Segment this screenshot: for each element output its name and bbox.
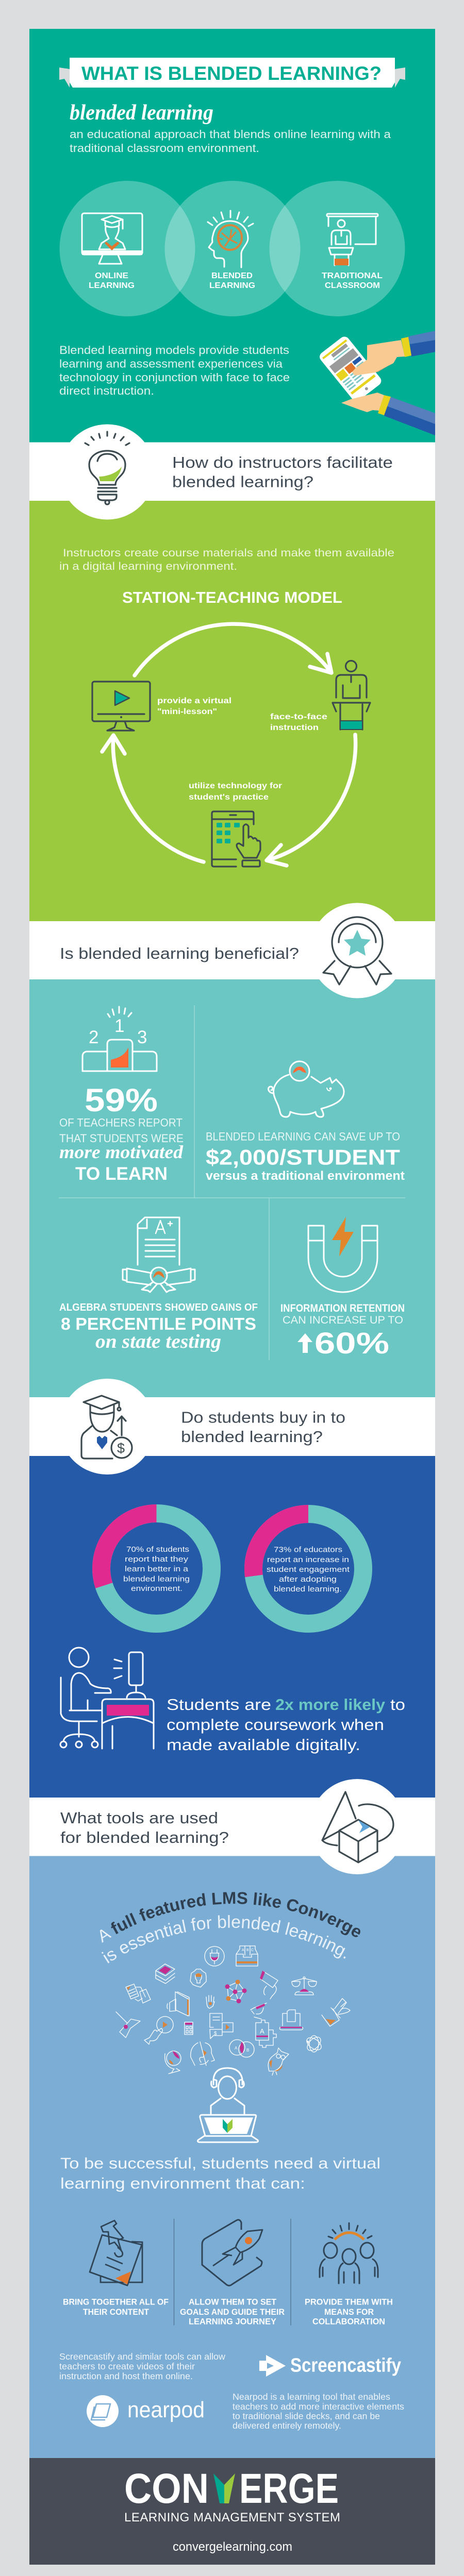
arrow: practice to video xyxy=(102,735,204,862)
heading xyxy=(60,1809,229,1846)
callout: coursework: complete coursework when xyxy=(167,1716,384,1734)
icon: calculator xyxy=(185,2022,193,2035)
column labels: THEIR CONTENT xyxy=(83,2307,150,2317)
icon: graduate and dollar xyxy=(81,1396,132,1459)
text: nearpod: delivered entirely remotely. xyxy=(233,2420,341,2431)
icon: venn A B: B xyxy=(246,2048,249,2053)
stat: 2000 per student xyxy=(206,1130,405,1183)
heading: Is blended learning beneficial? xyxy=(60,944,299,962)
heading: How do instructors facilitate xyxy=(172,453,393,471)
stat: 59 percent: 59% xyxy=(85,1082,158,1118)
icon: podium xyxy=(82,1007,157,1071)
icon: documents xyxy=(126,1984,151,2003)
heading: What tools are used xyxy=(60,1809,218,1827)
heading xyxy=(172,453,393,490)
paragraph: technology in conjunction with face to face xyxy=(59,371,290,384)
paragraph: direct instruction. xyxy=(59,384,154,397)
icon: test and diploma xyxy=(123,1217,195,1292)
icon cluster: learning topics xyxy=(116,1946,350,2075)
curved heading: is essential for blended learning. xyxy=(101,1915,345,1963)
intro text: Instructors create course materials and make them available xyxy=(63,547,394,559)
panel: benefits xyxy=(29,979,435,1397)
circle labels: LEARNING xyxy=(209,281,255,290)
text: screencastify: teachers to create videos of their xyxy=(59,2361,195,2371)
panel: what is blended learning xyxy=(29,29,435,443)
model heading: STATION-TEACHING MODEL xyxy=(122,588,342,606)
icon: scale xyxy=(292,1977,317,1995)
heading xyxy=(181,1409,345,1446)
icon: puzzle: A xyxy=(260,2027,264,2035)
paragraph: learning and assessment experiences via xyxy=(59,358,283,370)
definition text xyxy=(70,128,391,155)
arrow: video to face-to-face xyxy=(135,624,332,675)
definition text: an educational approach that blends online learning with a xyxy=(70,128,391,141)
heading: blended learning? xyxy=(181,1428,323,1446)
icon: 3d shapes xyxy=(322,1792,393,1862)
stat: 2000 per student: BLENDED LEARNING CAN SAVE UP TO xyxy=(206,1130,400,1143)
stat: 59 percent: OF TEACHERS REPORT xyxy=(59,1116,183,1129)
column labels: LEARNING JOURNEY xyxy=(189,2316,277,2327)
band: do students buy in xyxy=(29,1379,435,1475)
callout: coursework xyxy=(167,1696,405,1754)
curved heading: A full featured LMS like Converge xyxy=(100,1892,360,1943)
stat: 8 percentile points: on state testing xyxy=(95,1331,221,1352)
heading: blended learning? xyxy=(172,473,313,490)
paragraph: Blended learning models provide students xyxy=(59,344,289,357)
donut text: after adopting xyxy=(279,1575,337,1584)
icon: owl xyxy=(268,2048,289,2075)
donut text: environment. xyxy=(131,1584,183,1593)
icon: plug xyxy=(205,1946,224,1966)
stat: 8 percentile points: 8 PERCENTILE POINTS xyxy=(61,1314,256,1333)
band: how do instructors facilitate xyxy=(29,425,435,519)
stat: retention 60 percent: 60% xyxy=(314,1327,389,1360)
callout: coursework: Students are xyxy=(167,1696,271,1714)
icon: hand xyxy=(206,1995,214,2008)
icon: collaboration people xyxy=(320,2223,378,2283)
donut text: student engagement xyxy=(267,1565,350,1574)
label: face-to-face: instruction xyxy=(270,723,319,732)
definition text: traditional classroom environment. xyxy=(70,142,259,155)
column labels: PROVIDE THEM WITH xyxy=(305,2297,393,2307)
circle labels: LEARNING xyxy=(89,281,135,290)
column labels: COLLABORATION xyxy=(312,2316,385,2327)
logo: nearpod xyxy=(87,2395,205,2427)
donut chart: 70 percent xyxy=(101,1514,211,1624)
icon: network xyxy=(225,1979,246,2003)
label: practice: student's practice xyxy=(189,793,269,802)
panel: student buy-in xyxy=(29,1456,435,1798)
donut text: 73% of educators xyxy=(274,1546,342,1554)
callout: coursework: made available digitally. xyxy=(167,1736,360,1754)
stat: retention 60 percent xyxy=(280,1302,405,1360)
script heading: blended learning xyxy=(70,101,213,125)
icon: teacher at podium xyxy=(333,660,370,730)
text: to be successful: learning environment that can: xyxy=(60,2175,305,2192)
label: face-to-face xyxy=(270,713,327,732)
icon: rocket laptop xyxy=(202,2220,262,2285)
text: nearpod: teachers to add more interactive elements xyxy=(233,2401,404,2412)
column labels: MEANS FOR xyxy=(324,2307,374,2317)
heading: for blended learning? xyxy=(60,1828,229,1846)
circle labels: ONLINE xyxy=(95,272,128,280)
intro text xyxy=(59,547,394,572)
logo: nearpod: nearpod xyxy=(127,2397,205,2422)
band: what tools are used xyxy=(29,1779,435,1874)
icon: file box xyxy=(236,1946,258,1966)
label: mini-lesson: provide a virtual xyxy=(157,697,231,705)
icon: file box: B xyxy=(246,1948,249,1952)
text: to be successful: To be successful, students need a virtual xyxy=(60,2155,380,2172)
stat: 59 percent xyxy=(59,1082,184,1184)
venn circles xyxy=(60,181,405,316)
icon: chat bubbles: $ xyxy=(214,2031,217,2037)
icon: video monitor xyxy=(92,682,150,731)
band: is blended learning beneficial xyxy=(29,903,435,998)
donut text: blended learning. xyxy=(274,1585,342,1594)
text: screencastify xyxy=(59,2351,225,2381)
circle labels xyxy=(89,272,383,290)
icon: venn A B xyxy=(229,2040,254,2057)
icon: chat bubbles xyxy=(210,2013,233,2039)
column labels: GOALS AND GUIDE THEIR xyxy=(180,2307,285,2317)
icon: touch play xyxy=(144,2016,173,2044)
icon: file box: A xyxy=(242,1948,244,1952)
stat: 8 percentile points xyxy=(59,1302,258,1352)
logo: converge: V xyxy=(213,2465,235,2512)
stat: retention 60 percent: CAN INCREASE UP TO xyxy=(283,1314,403,1326)
donut text: report that they xyxy=(125,1555,189,1564)
icon: microscope xyxy=(251,2003,267,2019)
icon: atom xyxy=(305,2035,323,2053)
stat: 59 percent: THAT STUDENTS WERE xyxy=(59,1132,184,1145)
text: to be successful xyxy=(60,2155,380,2192)
icon: traditional classroom xyxy=(327,214,378,265)
icon: piggy bank xyxy=(268,1061,344,1117)
donut text: blended learning xyxy=(123,1574,190,1584)
icon: tablet and hand xyxy=(212,811,260,867)
label: mini-lesson xyxy=(157,697,231,716)
icon: podium: 3 xyxy=(137,1027,147,1047)
website: convergelearning.com xyxy=(173,2540,292,2554)
icon: torso xyxy=(191,2042,214,2065)
curved heading xyxy=(100,1892,360,1963)
icon: laptop quiz xyxy=(279,2010,303,2030)
icon: books xyxy=(156,1964,175,1984)
circle labels: BLENDED xyxy=(211,272,253,280)
circle labels: CLASSROOM xyxy=(325,281,380,290)
label: practice xyxy=(189,782,282,802)
stat: 59 percent: TO LEARN xyxy=(75,1164,168,1184)
stat: 2000 per student: versus a traditional environment xyxy=(206,1169,405,1183)
illustration: hands holding tablet xyxy=(318,331,435,435)
label: practice: utilize technology for xyxy=(189,782,282,790)
text: nearpod xyxy=(233,2392,404,2431)
logo: converge: ERGE xyxy=(239,2465,339,2512)
stat: retention 60 percent: INFORMATION RETENTION xyxy=(280,1302,405,1314)
donut chart: 73 percent xyxy=(253,1514,363,1624)
stat: 2000 per student: $2,000/STUDENT xyxy=(206,1145,400,1170)
icon: head and tablet xyxy=(260,1971,278,1999)
icon: puzzle xyxy=(256,2020,276,2047)
icon: speaker and book xyxy=(167,1992,189,2016)
paragraph xyxy=(59,344,290,397)
tagline: LEARNING MANAGEMENT SYSTEM xyxy=(124,2511,340,2524)
panel: tools xyxy=(29,1856,435,2458)
stat: 59 percent: more motivated xyxy=(59,1142,184,1162)
icon: tower xyxy=(116,2012,140,2038)
label: mini-lesson: "mini-lesson" xyxy=(157,707,217,716)
donut text: learn better in a xyxy=(125,1565,189,1573)
panel: footer xyxy=(29,2458,435,2565)
icon: student with laptop xyxy=(198,2068,258,2142)
logo: converge xyxy=(124,2465,339,2512)
icon: podium: 1 xyxy=(114,1016,124,1036)
logo: converge: CON xyxy=(124,2465,209,2512)
intro text: in a digital learning environment. xyxy=(59,561,237,572)
donut text xyxy=(123,1545,190,1593)
title banner xyxy=(59,58,405,88)
icon: online learning xyxy=(82,213,142,264)
column labels: BRING TOGETHER ALL OF xyxy=(63,2297,169,2307)
icon: blended learning brain xyxy=(208,211,253,267)
icon: podium: 2 xyxy=(89,1027,98,1047)
title: WHAT IS BLENDED LEARNING? xyxy=(81,63,382,84)
icon: venn A B: A xyxy=(235,2046,238,2050)
icon: file box: C xyxy=(251,1948,254,1952)
text: nearpod: Nearpod is a learning tool that enables xyxy=(233,2392,390,2402)
text: screencastify: Screencastify and similar tools can allow xyxy=(59,2351,225,2362)
stat: 8 percentile points: ALGEBRA STUDENTS SHOWED GAINS OF xyxy=(59,1302,258,1313)
label: face-to-face: face-to-face xyxy=(270,713,327,721)
circle labels: TRADITIONAL xyxy=(322,272,383,280)
column labels xyxy=(63,2297,393,2327)
panel: station-teaching model xyxy=(29,501,435,921)
donut text: report an increase in xyxy=(267,1555,349,1564)
logo: screencastify: Screencastify xyxy=(290,2354,401,2376)
icon: bulb gear xyxy=(190,1969,206,1987)
icon: award ribbon xyxy=(323,917,391,985)
icon: pinned note xyxy=(90,2221,142,2285)
icon: magnet xyxy=(308,1217,377,1292)
logo: screencastify xyxy=(259,2354,401,2377)
icon: globe xyxy=(165,2051,181,2074)
icon: light bulb xyxy=(85,432,129,504)
column labels: ALLOW THEM TO SET xyxy=(189,2297,277,2307)
icon: student at desk xyxy=(60,1648,154,1749)
callout: coursework: to xyxy=(390,1696,405,1714)
callout: coursework: 2x more likely xyxy=(275,1696,386,1714)
donut text xyxy=(267,1546,350,1594)
arrow: face-to-face to practice xyxy=(267,735,356,866)
text: screencastify: instruction and host them online. xyxy=(59,2371,193,2381)
heading: Do students buy in to xyxy=(181,1409,345,1426)
text: nearpod: to traditional slide decks, and can be xyxy=(233,2411,380,2421)
icon: graduate and dollar: $ xyxy=(117,1440,125,1456)
icon: pencil pot xyxy=(322,1998,350,2026)
donut text: 70% of students xyxy=(126,1545,189,1554)
